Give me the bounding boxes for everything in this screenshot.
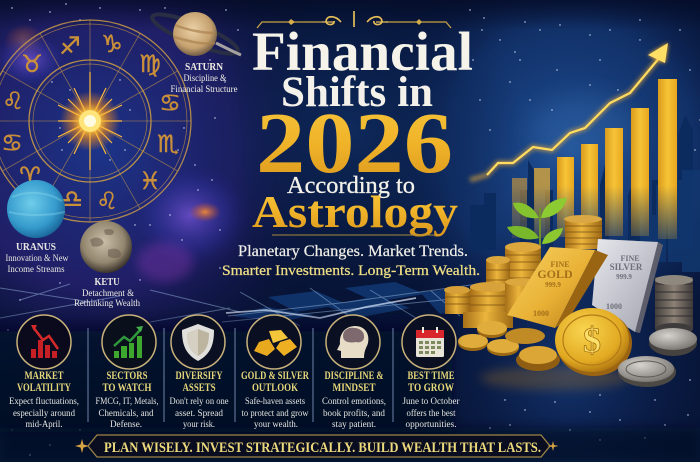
heading: MARKET — [24, 370, 64, 382]
subtitle: Smarter Investments. Long-Term Wealth. — [222, 263, 480, 279]
zodiac wheel — [0, 20, 191, 222]
planet: Uranus — [7, 180, 65, 238]
description — [242, 396, 309, 430]
title: 2026 — [256, 94, 453, 191]
heading — [408, 370, 455, 394]
column: diversify assets — [170, 315, 228, 430]
title: Shifts in — [281, 69, 433, 116]
description — [9, 396, 79, 430]
title underline — [272, 234, 436, 236]
icon: gold bars — [247, 315, 301, 369]
label: Uranus: URANUS — [16, 242, 56, 253]
description: FMCG, IT, Metals, — [96, 397, 158, 407]
label: Saturn: SATURN — [185, 62, 224, 73]
dollar coin: $ — [583, 320, 601, 360]
icon: calendar — [402, 315, 456, 369]
description: Expect fluctuations, — [9, 396, 79, 407]
label: Ketu: Rethinking Wealth — [74, 299, 140, 309]
heading — [176, 370, 223, 394]
heading: OUTLOOK — [252, 382, 298, 394]
description — [402, 397, 460, 430]
column dividers — [88, 328, 393, 422]
zodiac signs: ♌︎ — [96, 189, 118, 215]
title: According to — [287, 173, 415, 199]
rising arrow — [470, 43, 668, 180]
column: discipline and mindset — [322, 315, 386, 430]
lower panel shade — [0, 312, 452, 432]
subtitle: Planetary Changes. Market Trends. — [238, 243, 468, 260]
description: to protect and grow — [242, 409, 309, 419]
bottom banner — [75, 435, 558, 457]
heading: DISCIPLINE & — [324, 370, 384, 382]
gold bar — [507, 247, 608, 328]
heading — [241, 370, 310, 394]
title — [252, 21, 473, 237]
description: June to October — [402, 397, 460, 407]
label: Ketu — [74, 277, 140, 309]
description: Chemicals, and — [98, 409, 154, 419]
silver bar — [592, 239, 663, 333]
zodiac signs: ♎︎ — [61, 187, 83, 213]
icon: head with brain — [326, 315, 380, 369]
label: Uranus: Innovation & New — [6, 254, 69, 264]
heading — [17, 370, 72, 394]
zodiac signs: ♌︎ — [2, 89, 24, 115]
heading: ASSETS — [182, 382, 216, 394]
label: Saturn: Discipline & — [184, 74, 227, 84]
heading: SECTORS — [106, 370, 148, 382]
description: Don't rely on one — [170, 397, 228, 407]
heading: GOLD & SILVER — [241, 370, 310, 382]
heading: VOLATILITY — [17, 382, 72, 394]
gold coin stacks — [444, 215, 602, 328]
icon: rising green chart — [102, 315, 156, 369]
zodiac signs: ♓︎ — [139, 169, 161, 195]
description: Control emotions, — [322, 397, 386, 407]
zodiac signs — [1, 32, 181, 215]
label: Uranus — [6, 242, 69, 275]
gold bar: GOLD — [537, 267, 573, 281]
city skyline — [470, 115, 700, 272]
heading — [102, 370, 152, 394]
icon: falling red chart — [17, 315, 71, 369]
heading: TO GROW — [408, 382, 454, 394]
plant sprout — [507, 198, 567, 246]
zodiac signs: ♑︎ — [101, 32, 123, 58]
column: market volatility — [9, 315, 79, 430]
label: Saturn — [170, 62, 238, 95]
silver coin stack — [655, 275, 693, 335]
label: Ketu: Detachment & — [82, 289, 135, 299]
zodiac signs: ♈︎ — [19, 164, 41, 190]
heading: DIVERSIFY — [176, 370, 223, 382]
column: sectors to watch — [96, 315, 158, 430]
sun burst — [58, 72, 122, 170]
gold bar: 1000 — [533, 309, 549, 318]
reflection on floor — [480, 366, 630, 390]
bottom band shade — [0, 428, 700, 462]
label: Saturn: Financial Structure — [170, 85, 238, 95]
label: Ketu: KETU — [94, 277, 120, 288]
planet: Ketu — [80, 221, 132, 273]
heading: BEST TIME — [408, 370, 455, 382]
column: gold and silver outlook — [241, 315, 310, 430]
description: opportunities. — [406, 420, 456, 430]
zodiac signs: ♋︎ — [159, 91, 181, 117]
description — [322, 397, 386, 430]
silver bar: 999.9 — [616, 273, 632, 281]
gold bar: 999.9 — [545, 281, 561, 289]
bottom banner: PLAN WISELY. INVEST STRATEGICALLY. BUILD WEALTH THAT LASTS. — [104, 440, 541, 456]
description: stay patient. — [332, 420, 376, 430]
silver bar: 1000 — [606, 302, 622, 311]
title: Astrology — [252, 186, 458, 237]
dollar coin — [555, 308, 632, 376]
description: especially around — [13, 409, 75, 419]
heading: TO WATCH — [102, 382, 152, 394]
title: Financial — [252, 21, 473, 82]
column: best time to grow — [402, 315, 460, 430]
description: mid-April. — [26, 420, 62, 430]
zodiac signs: ♉︎ — [21, 52, 43, 78]
description: your risk. — [183, 420, 215, 430]
silver coins — [618, 328, 697, 387]
zodiac signs: ♋︎ — [1, 131, 23, 157]
silver bar: SILVER — [610, 262, 643, 272]
heading — [324, 370, 384, 394]
description: your wealth. — [254, 420, 298, 430]
description — [96, 397, 158, 430]
description: Safe-haven assets — [245, 396, 305, 407]
title ornament — [257, 11, 451, 28]
icon: shield — [171, 315, 225, 369]
gold and silver stack — [444, 215, 697, 390]
small gold coins — [458, 321, 560, 371]
grid floor — [0, 282, 490, 326]
gold bar: FINE — [550, 260, 570, 269]
planet: Saturn — [149, 7, 241, 61]
subtitle — [222, 243, 480, 279]
description: offers the best — [406, 408, 456, 419]
description — [170, 397, 228, 430]
description: Defense. — [110, 419, 142, 430]
zodiac signs: ♏︎ — [157, 132, 179, 158]
label: Uranus: Income Streams — [8, 265, 65, 275]
heading: MINDSET — [332, 382, 376, 394]
description: book profits, and — [323, 408, 385, 419]
zodiac signs: ♐︎ — [59, 34, 81, 60]
zodiac signs: ♍︎ — [139, 52, 161, 78]
silver bar: FINE — [620, 254, 640, 263]
growth bar chart — [512, 79, 677, 239]
description: asset. Spread — [175, 409, 223, 419]
